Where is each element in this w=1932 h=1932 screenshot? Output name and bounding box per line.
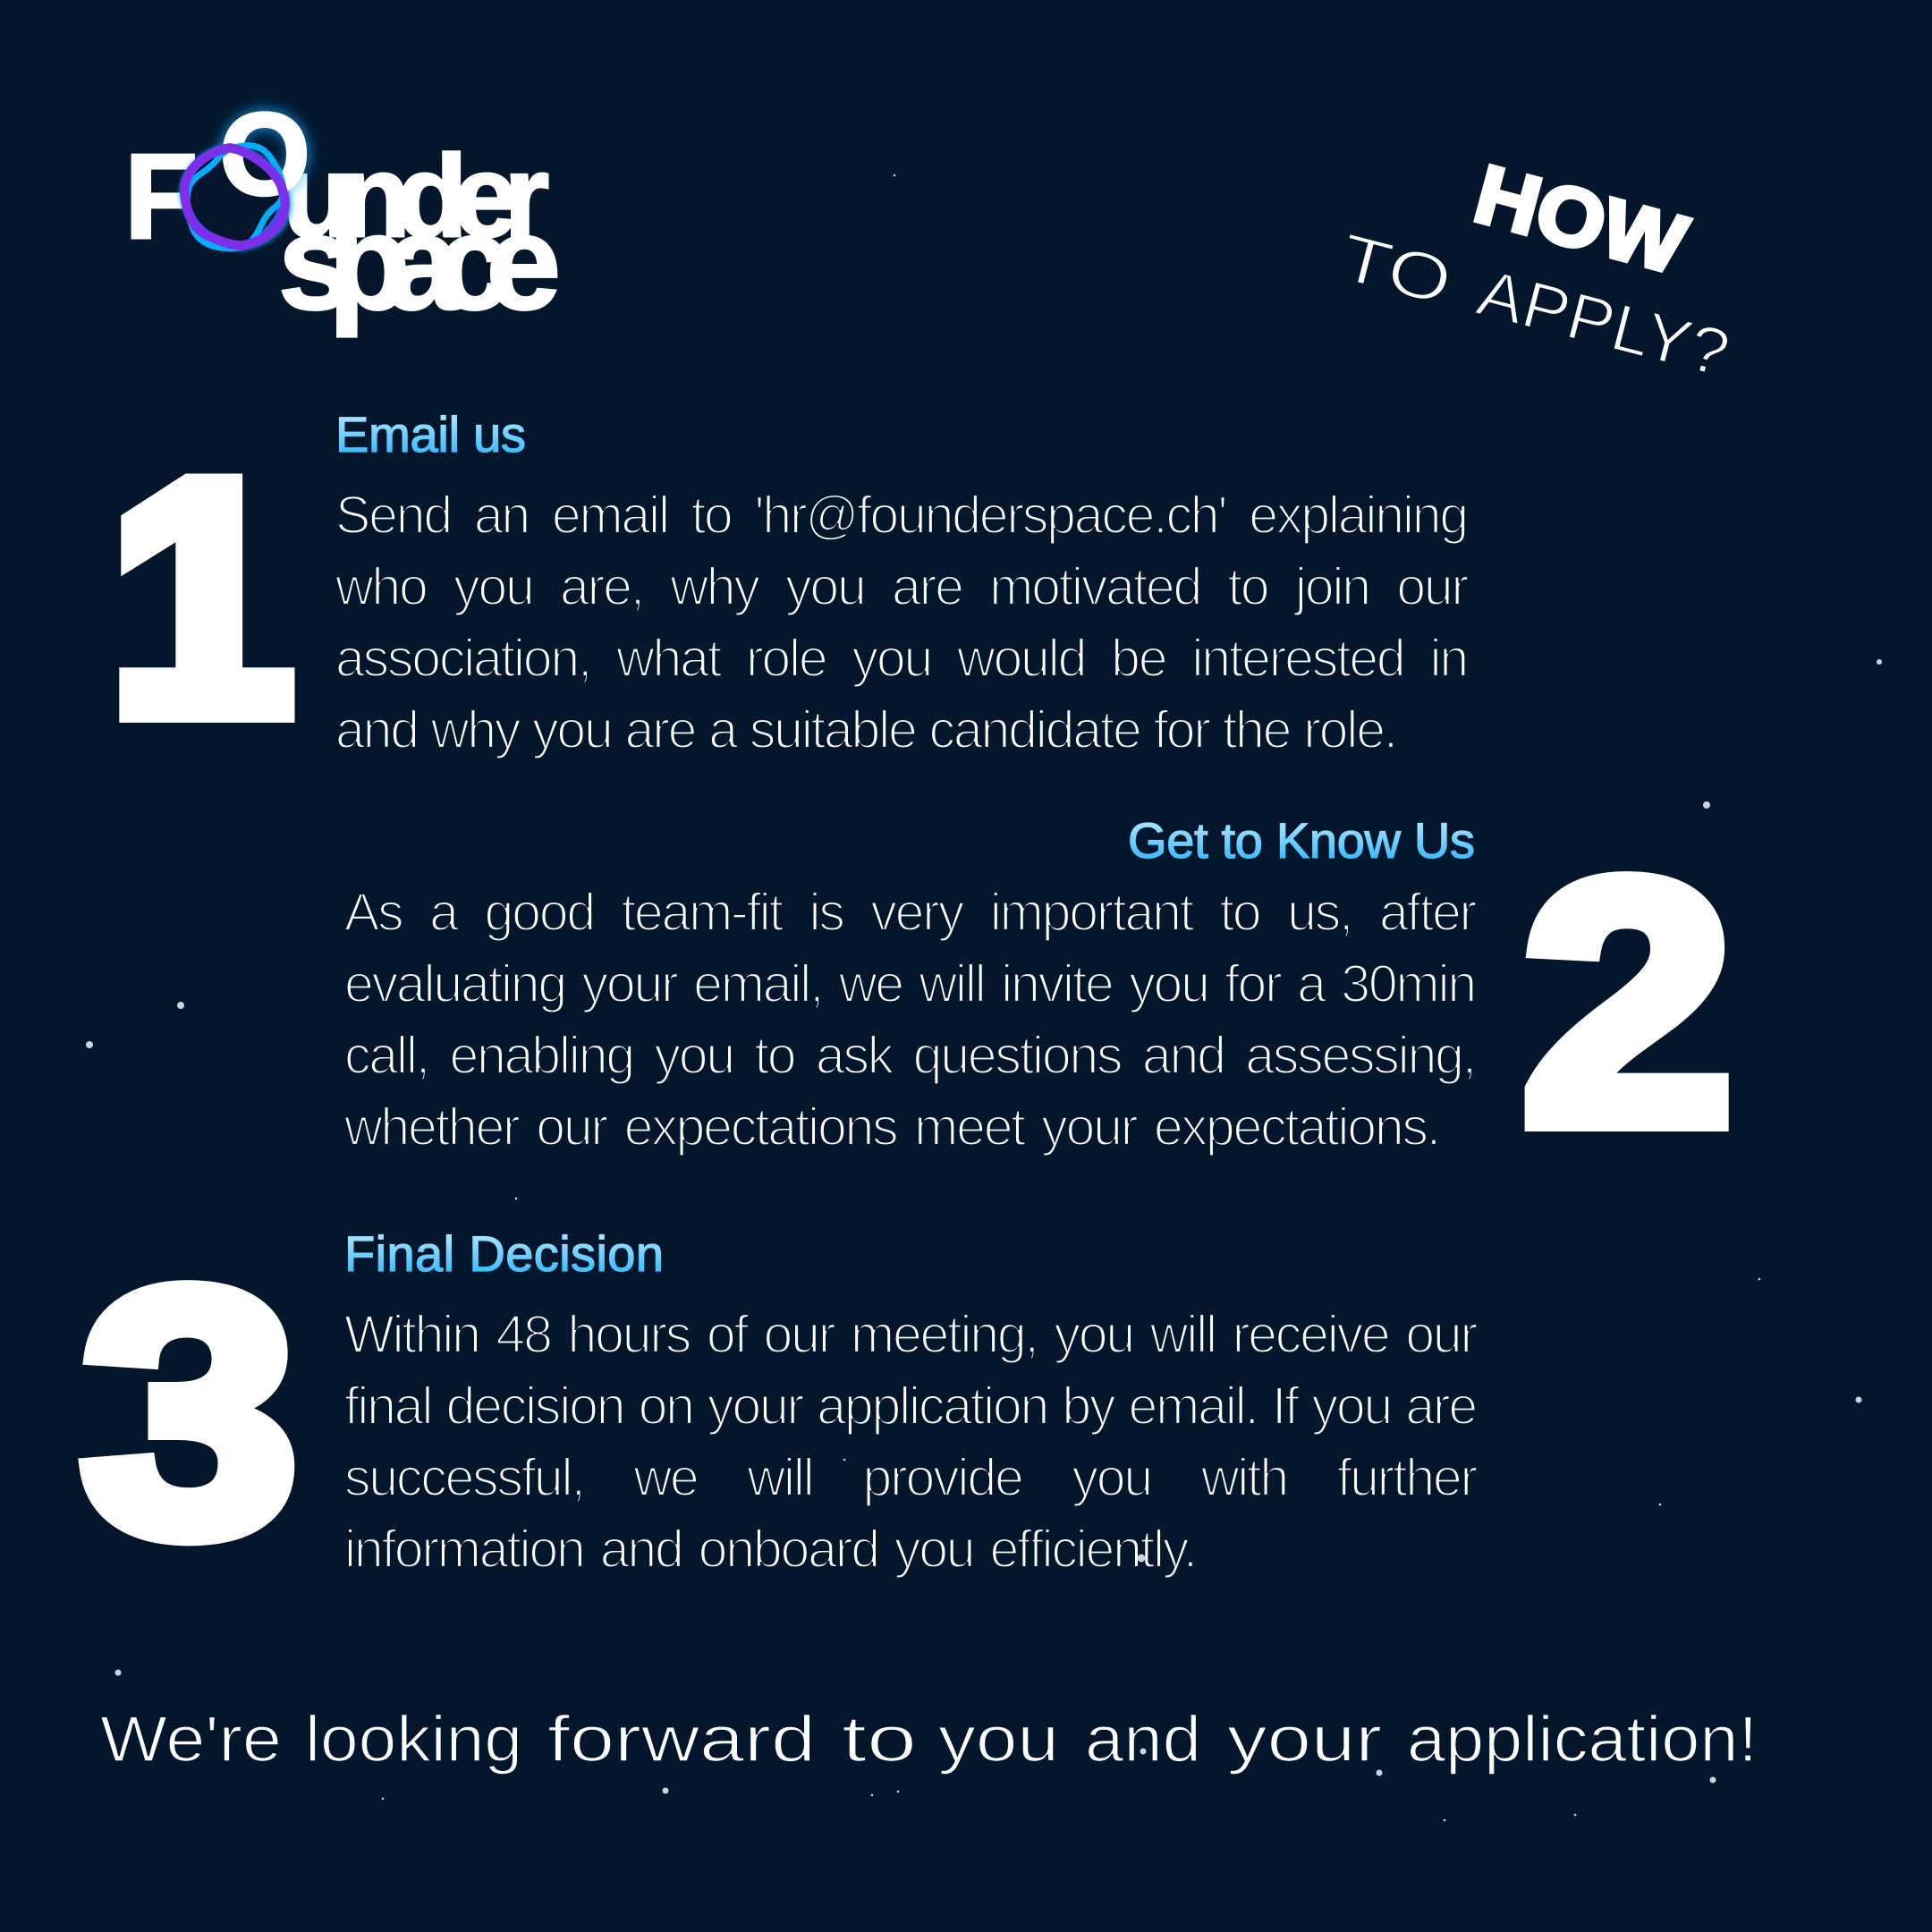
closing line: your: [1227, 1704, 1382, 1775]
text block: step 3: [344, 1305, 1477, 1579]
text block: step 3: successful, we will provide you with further: [344, 1448, 1476, 1507]
text block: step 1: and why you are a suitable candidate for the role.: [335, 700, 1396, 759]
text block: step 2: evaluating your email, we will invite you for a 30min: [344, 954, 1475, 1013]
number 3: 3: [81, 1219, 298, 1606]
text block: step 1: who you are, why you are motivated to join our: [335, 557, 1467, 616]
closing line: looking: [305, 1704, 522, 1775]
title: how to apply: [1333, 148, 1737, 391]
text block: step 1: [335, 486, 1468, 759]
text block: step 3: information and onboard you efficiently.: [344, 1520, 1196, 1579]
text block: step 2: [344, 883, 1476, 1157]
closing line: you: [938, 1704, 1059, 1775]
closing line: application!: [1407, 1704, 1758, 1775]
logo word under: under: [283, 131, 549, 261]
decorative stars: [86, 174, 1882, 1821]
title word HOW: HOW: [1466, 148, 1695, 292]
logo glow: [184, 119, 299, 246]
logo word space: space: [278, 187, 561, 337]
logo blob interior: [184, 148, 287, 246]
number 2: 2: [1522, 810, 1733, 1195]
text block: step 1: association, what role you would be interested in: [335, 629, 1467, 688]
closing line: We're: [100, 1704, 282, 1775]
closing line: [100, 1704, 1758, 1775]
text block: step 2: As a good team-fit is very important to us, after: [344, 883, 1475, 942]
number 1: 1: [109, 413, 293, 783]
closing line: forward: [547, 1704, 816, 1775]
text block: step 2: whether our expectations meet your expectations.: [344, 1097, 1439, 1157]
closing line: and: [1085, 1704, 1201, 1775]
text block: step 1: Send an email to 'hr@founderspace.ch' explaining: [335, 486, 1467, 545]
closing line: to: [842, 1704, 917, 1775]
word TO: TO: [1333, 219, 1460, 319]
word APPLY?: APPLY?: [1470, 255, 1737, 391]
title words to apply: [1333, 219, 1737, 391]
text block: step 2: call, enabling you to ask questions and assessing,: [344, 1026, 1475, 1085]
heading: Get to Know Us: Get to Know Us: [1128, 812, 1475, 869]
text block: step 3: Within 48 hours of our meeting, you will receive our: [344, 1305, 1476, 1364]
text block: step 3: final decision on your application by email. If you are: [344, 1377, 1476, 1436]
heading: Email us: Email us: [335, 406, 526, 462]
logo letter F: F: [124, 129, 198, 264]
logo: Founder Space: [124, 89, 561, 337]
logo letter O: O: [219, 89, 310, 219]
heading: Final Decision: Final Decision: [344, 1225, 664, 1282]
logo blobs: [184, 146, 285, 248]
